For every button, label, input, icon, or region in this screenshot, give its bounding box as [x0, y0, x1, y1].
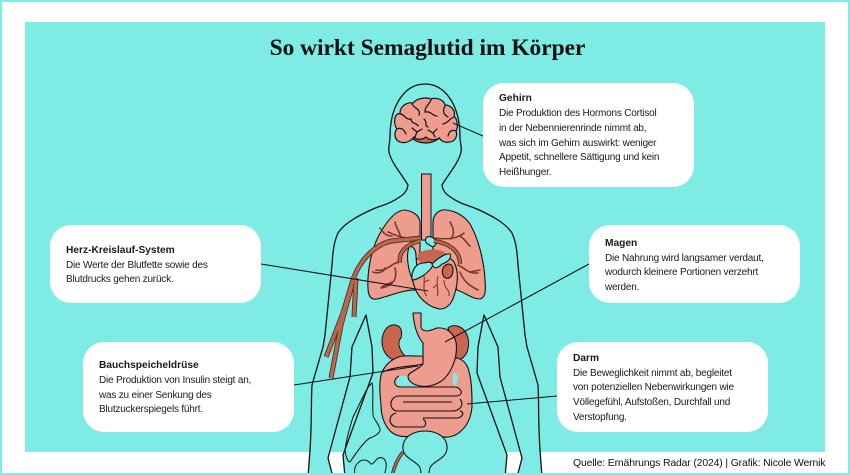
- card: Darm: Völlegefühl, Aufstoßen, Durchfall und: [573, 397, 730, 408]
- card: Magen: [589, 225, 800, 303]
- organ: intestines: [380, 356, 472, 437]
- card: Darm: Die Beweglichkeit nimmt ab, begleitet: [573, 368, 732, 379]
- title: So wirkt Semaglutid im Körper: [270, 35, 585, 61]
- artery from arm: [326, 238, 460, 378]
- card: Darm: Darm: [573, 353, 599, 364]
- organ: trachea: [422, 174, 431, 240]
- card: Herz-Kreislauf-System: [50, 225, 261, 303]
- source credit: Quelle: Ernährungs Radar (2024) | Grafik: Nicole Wernik: [573, 458, 825, 469]
- card: Darm: [557, 342, 768, 432]
- card: Bauchspeicheldrüse: [83, 342, 294, 432]
- organ: pelvic bones: [345, 383, 386, 475]
- organ: bladder: [403, 431, 447, 475]
- organ: brain: [395, 98, 457, 143]
- card: Bauchspeicheldrüse: was zu einer Senkung des: [99, 390, 212, 401]
- card: Gehirn: Gehirn: [499, 93, 532, 104]
- card: Magen: werden.: [605, 282, 639, 293]
- card: Magen: Die Nahrung wird langsamer verdaut,: [605, 253, 764, 264]
- card: Gehirn: in der Nebennierenrinde nimmt ab,: [499, 123, 646, 134]
- leader lines: [261, 123, 589, 404]
- card: Herz-Kreislauf-System: Blutdrucks gehen zurück.: [66, 274, 173, 285]
- coronary vessels: [424, 275, 449, 296]
- card: Gehirn: [483, 83, 694, 187]
- card: Gehirn: Heißhunger.: [499, 167, 551, 178]
- card: Bauchspeicheldrüse: Bauchspeicheldrüse: [99, 360, 199, 371]
- card: Darm: Verstopfung.: [573, 412, 627, 423]
- card: Gehirn: Appetit, schnellere Sättigung und kein: [499, 152, 659, 163]
- organ: kidneys: [382, 325, 469, 360]
- organ: heart: [408, 237, 457, 309]
- card: Bauchspeicheldrüse: Blutzuckerspiegels führt.: [99, 404, 203, 415]
- organ: stomach: [408, 313, 456, 386]
- vein: [392, 452, 403, 475]
- organ: lungs: [368, 210, 485, 299]
- card: Herz-Kreislauf-System: Herz-Kreislauf-System: [66, 245, 175, 256]
- card: Herz-Kreislauf-System: Die Werte der Blutfette sowie des: [66, 260, 208, 271]
- card: Gehirn: was sich im Gehirn auswirkt: weniger: [499, 138, 656, 149]
- card: Magen: Magen: [605, 238, 637, 249]
- card: Bauchspeicheldrüse: Die Produktion von Insulin steigt an,: [99, 375, 251, 386]
- card: Magen: wodurch kleinere Portionen verzehrt: [605, 267, 758, 278]
- card: Gehirn: Die Produktion des Hormons Cortisol: [499, 108, 657, 119]
- card: Darm: von potenziellen Nebenwirkungen wie: [573, 382, 734, 393]
- body silhouette: [308, 84, 542, 475]
- bronchi: [373, 222, 480, 290]
